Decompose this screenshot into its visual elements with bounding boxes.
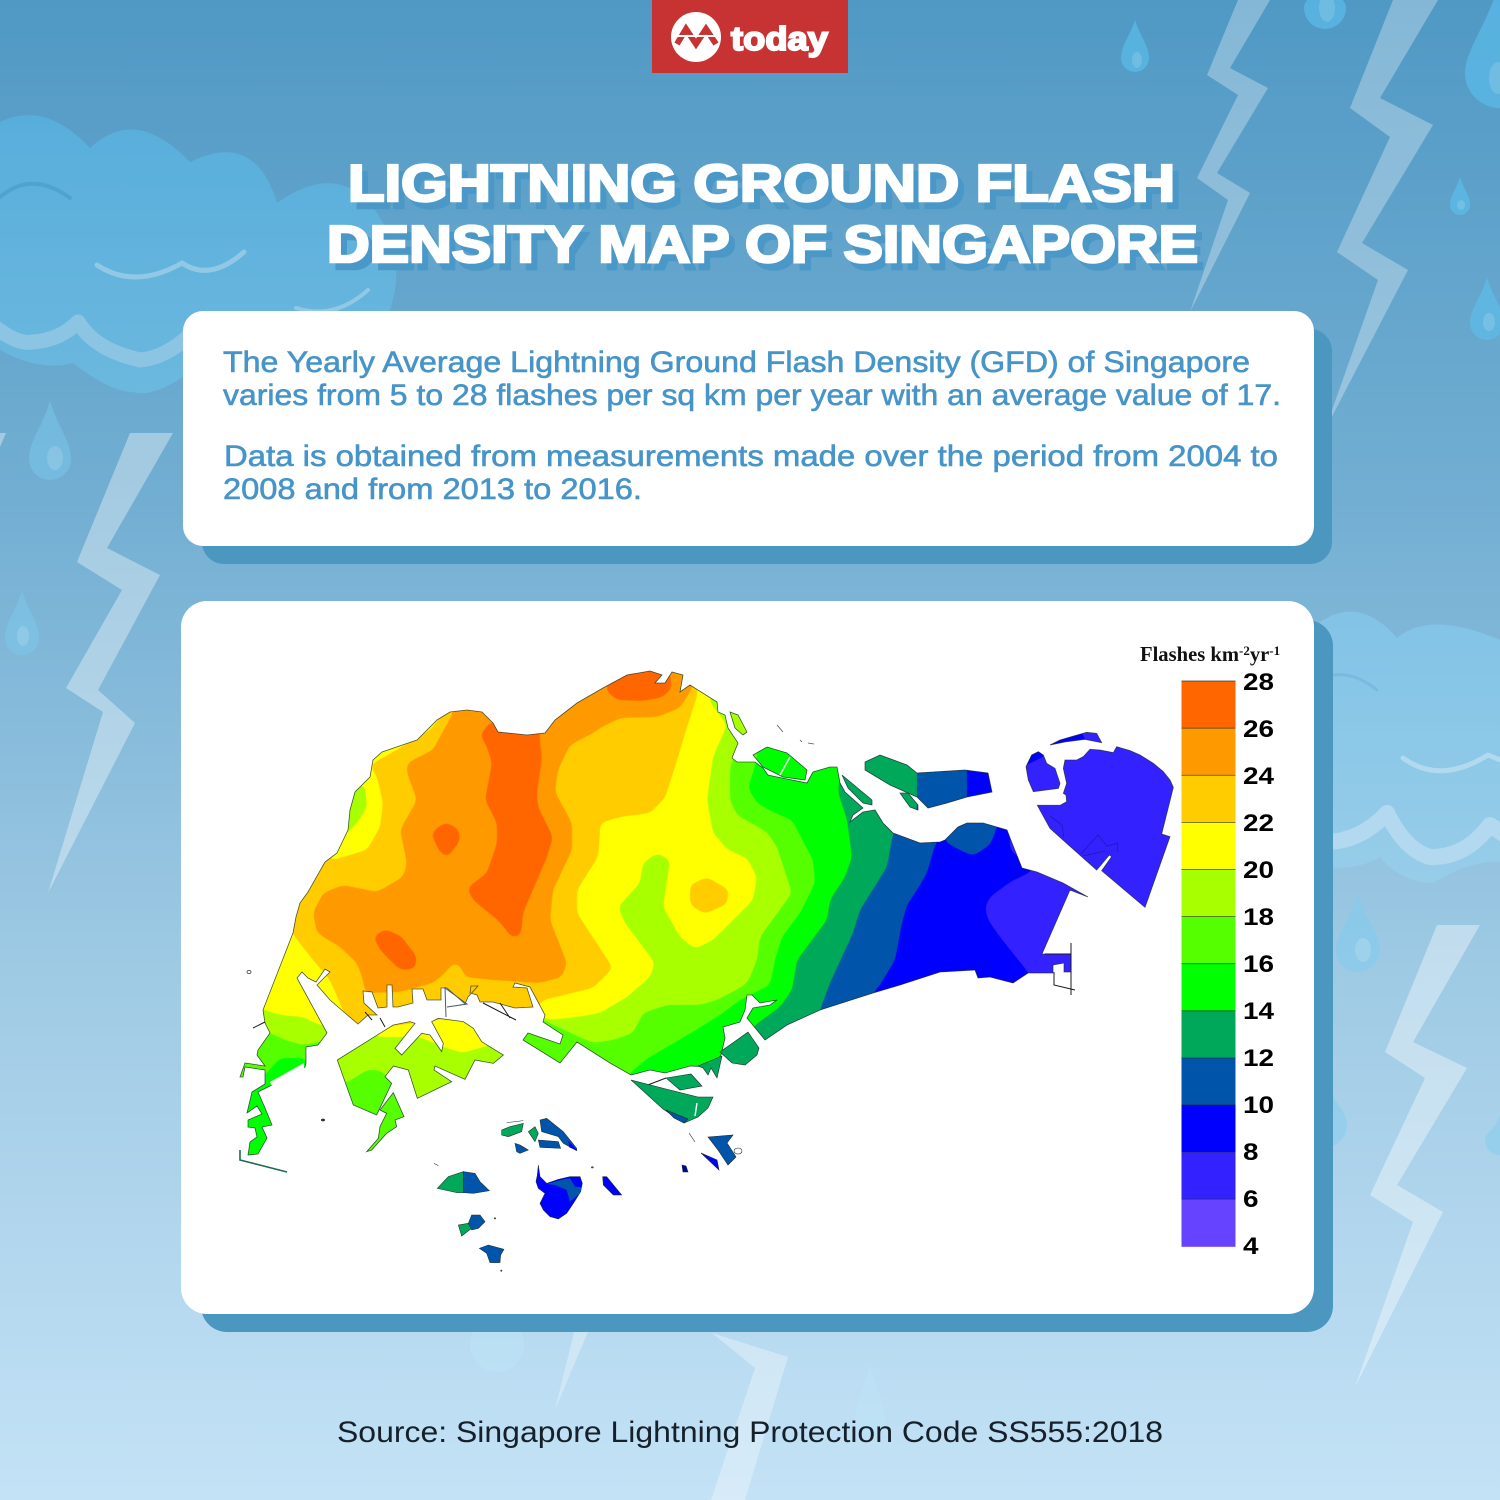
legend labels: 24 [1243, 763, 1275, 790]
lightning bolt: top right [1325, 0, 1438, 430]
legend labels: 8 [1243, 1139, 1258, 1166]
legend labels: 4 [1243, 1233, 1259, 1260]
title [327, 155, 1204, 281]
legend labels: 12 [1243, 1045, 1274, 1072]
legend [1140, 643, 1280, 1260]
legend labels: 6 [1243, 1186, 1258, 1213]
lightning bolt: left edge fragment [0, 433, 6, 447]
legend title: Flashes km [1140, 644, 1239, 666]
logo: today: today [731, 20, 829, 57]
title: LIGHTNING GROUND FLASH [354, 162, 1181, 220]
title: DENSITY MAP OF SINGAPORE [327, 216, 1198, 274]
islands: eastern southern group [682, 1133, 742, 1172]
lightning bolt: bottom left [555, 1320, 593, 1410]
island: Marina East [720, 1032, 759, 1065]
island: Marina South teeth [698, 1056, 722, 1078]
lightning bolt: top centre right [1190, 0, 1270, 312]
cloud: top left [0, 115, 396, 400]
cloud: right [1320, 612, 1500, 883]
text block: description: Data is obtained from measurements made over the period from 2004 to [224, 440, 1278, 473]
lightning bolt: bottom centre [711, 1333, 788, 1500]
coastline outlines [240, 671, 1173, 1155]
legend labels: 26 [1243, 716, 1274, 743]
lightning bolt: lower right [1355, 925, 1480, 1387]
lightning bolt: left [48, 433, 173, 893]
text block: description: 2008 and from 2013 to 2016. [223, 473, 642, 506]
channels and small details [240, 725, 1118, 1172]
island: Sentosa [631, 1074, 713, 1123]
legend title: -1 [1269, 643, 1280, 658]
legend labels: 16 [1243, 951, 1274, 978]
legend title: yr [1250, 644, 1269, 666]
text block: description [223, 346, 1281, 506]
text block: description: The Yearly Average Lightning Ground Flash Density (GFD) of Singapore [223, 346, 1250, 379]
legend labels: 28 [1243, 669, 1274, 696]
legend labels: 18 [1243, 904, 1274, 931]
panel: map [181, 600, 1333, 1332]
legend labels: 22 [1243, 810, 1274, 837]
legend colour bands [1182, 681, 1236, 1247]
source note: Source: Singapore Lightning Protection Code SS555:2018 [337, 1416, 1163, 1449]
text block: description: varies from 5 to 28 flashes per sq km per year with an average value of 17. [223, 379, 1281, 412]
legend labels: 14 [1243, 998, 1275, 1025]
panel: description [183, 311, 1332, 564]
legend title: -2 [1239, 643, 1250, 658]
title: LIGHTNING GROUND FLASH [348, 155, 1175, 213]
title: DENSITY MAP OF SINGAPORE [333, 223, 1204, 281]
chart: flash density contour map [239, 670, 1174, 1272]
Tekong northern blue slivers [1027, 733, 1085, 765]
legend labels: 20 [1243, 857, 1274, 884]
logo: today [652, 0, 848, 73]
southern islands [434, 1118, 622, 1271]
legend labels [1243, 669, 1275, 1260]
legend labels: 10 [1243, 1092, 1274, 1119]
